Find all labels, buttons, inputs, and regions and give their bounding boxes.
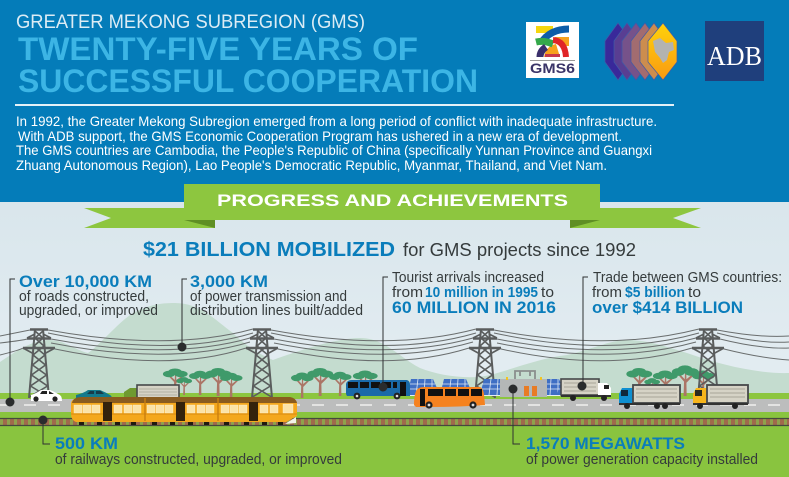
logo: GMS6: GMS6 [530,60,575,76]
logo: ADB [705,21,764,81]
power lines [0,329,789,361]
vehicle: blue truck [619,385,680,409]
road [0,399,789,412]
callout: tourist arrivals: from [392,285,423,301]
intro text [16,113,657,173]
headline: $21 billion mobilized: $21 BILLION MOBILIZED [143,239,395,261]
transmission towers [23,329,724,398]
callout: power generation: 1,570 MEGAWATTS [526,434,685,453]
intro text: The GMS countries are Cambodia, the People's Republic of China (specifically Yunnan Province and Guangxi [16,142,652,158]
subtitle: GREATER MEKONG SUBREGION (GMS) [16,11,365,33]
sky background [0,200,789,395]
solar panels [407,379,590,396]
callout: tourist arrivals: to [541,285,554,301]
intro text: With ADB support, the GMS Economic Cooperation Program has ushered in a new era of development. [18,128,622,144]
main title: TWENTY-FIVE YEARS OF [18,31,418,67]
intro text: In 1992, the Greater Mekong Subregion emerged from a long period of conflict with inadequate infrastructure. [16,113,657,129]
banner: progress and achievements [84,184,701,228]
lower grass [0,412,789,477]
callout: roads: of roads constructed, [19,289,149,305]
callout: railways [38,416,342,468]
callout: roads: upgraded, or improved [19,303,158,319]
train [71,397,297,425]
vehicle: orange bus [414,387,485,409]
logo: GMS hexagons [605,23,677,80]
banner: progress and achievements: PROGRESS AND ACHIEVEMENTS [217,191,568,210]
logo: ADB: ADB [707,41,762,71]
callout: trade: Trade between GMS countries: [593,270,782,286]
vehicle: white car [31,390,62,402]
trees [163,365,714,398]
callout: trade [578,270,782,390]
railway track [0,418,789,426]
vehicle: blue bus [346,380,410,399]
callout: roads [6,272,158,406]
main title [18,31,478,99]
vehicle: white truck [561,379,611,401]
callout: trade: to [688,285,701,301]
vehicle: teal car [76,390,112,399]
background hills [0,303,789,395]
callout: power transmission: of power transmission and [190,289,347,305]
intro text: Zhuang Autonomous Region), Lao People's Democratic Republic, Myanmar, Thailand, and Viet Nam. [16,157,607,173]
callout: railways: of railways constructed, upgraded, or improved [55,452,342,468]
callout: trade: over $414 BILLION [592,298,743,317]
callout: trade: $5 billion [625,285,685,301]
callout: power generation: of power generation capacity installed [526,452,758,468]
header panel [0,0,789,202]
callout: tourist arrivals [378,270,556,392]
callout: tourist arrivals: Tourist arrivals increased [392,270,544,286]
grass strip [0,393,789,400]
callout: railways: 500 KM [55,434,118,453]
headline: $21 billion mobilized [143,239,636,261]
callout: tourist arrivals: 10 million in 1995 [425,285,538,301]
callout: roads: Over 10,000 KM [19,272,152,291]
headline: $21 billion mobilized: for GMS projects since 1992 [403,240,636,260]
callout: power generation [508,384,758,468]
callout: trade: from [592,285,622,301]
substation [500,371,547,397]
callout: power transmission: distribution lines built/added [190,303,363,319]
vehicle: green truck behind train [124,385,179,399]
vehicle: yellow truck [693,385,748,409]
logo: GMS6 [526,22,579,78]
callout: tourist arrivals: 60 MILLION IN 2016 [392,298,556,317]
callout: power transmission [178,272,363,352]
main title: SUCCESSFUL COOPERATION [18,63,478,99]
callout: power transmission: 3,000 KM [190,272,268,291]
